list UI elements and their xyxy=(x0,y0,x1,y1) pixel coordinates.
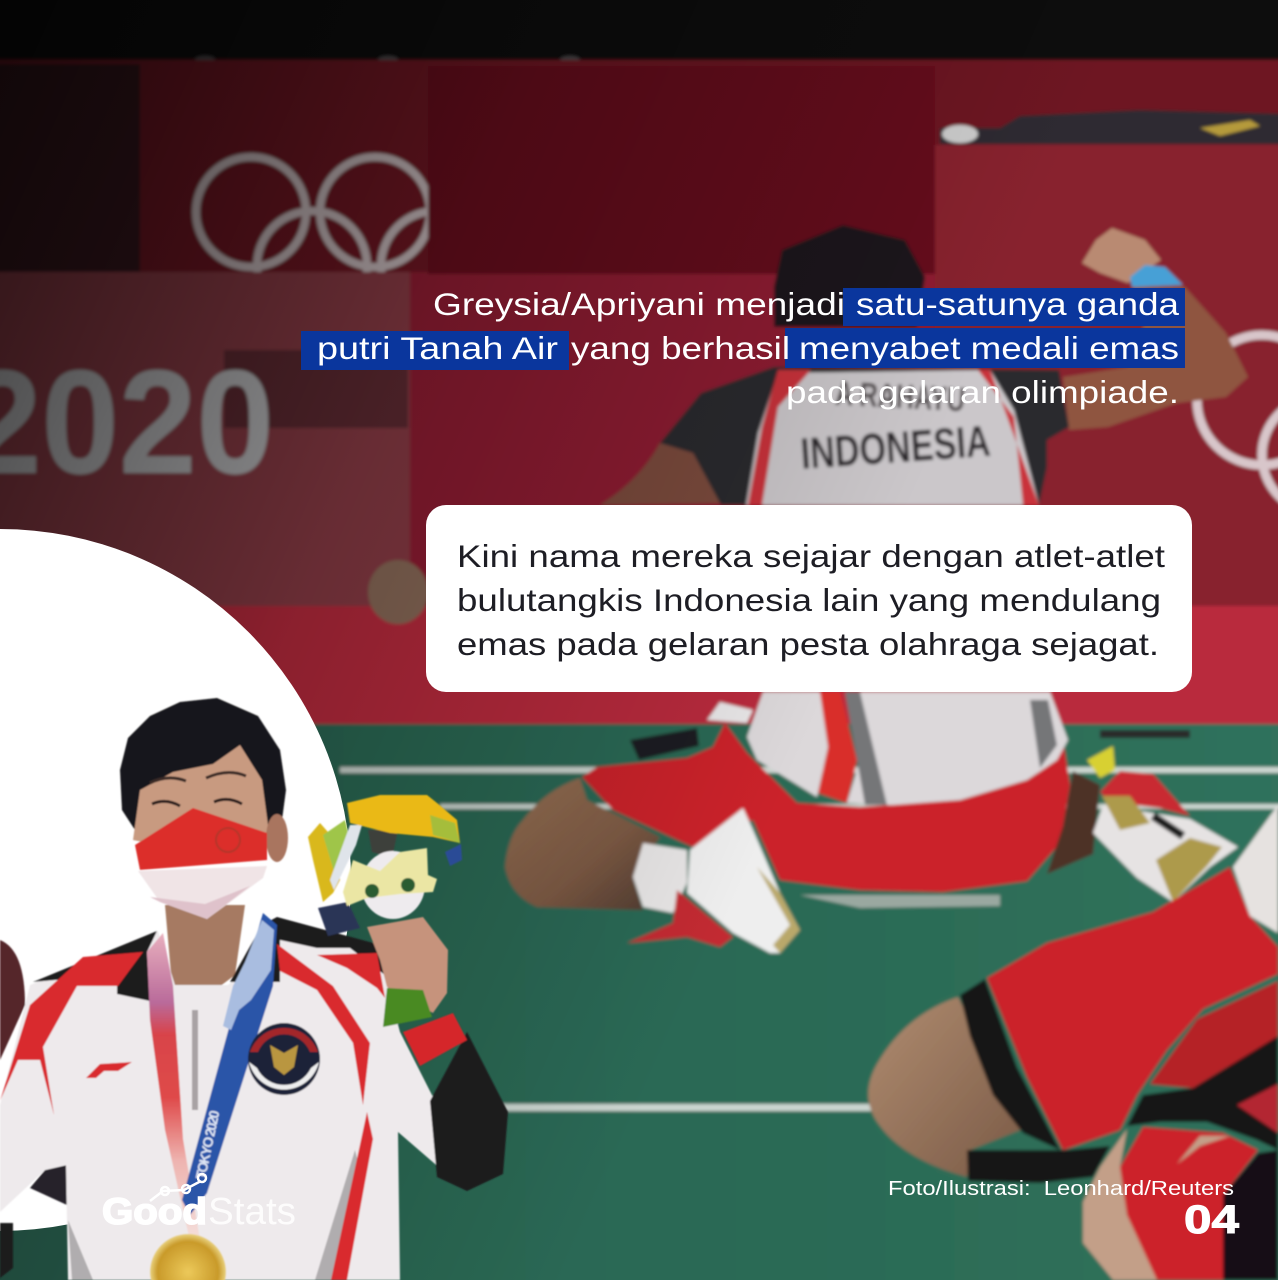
green court floor xyxy=(0,724,1278,1280)
page number: 04 xyxy=(1184,1198,1240,1242)
mask red xyxy=(135,808,267,870)
racket and bottle on top of board xyxy=(940,110,1278,144)
head xyxy=(774,225,925,327)
jersey name: INDONESIA xyxy=(799,417,992,479)
eyebrows and eyes xyxy=(150,772,246,783)
neck xyxy=(165,905,245,1005)
pink medal ribbon xyxy=(147,933,200,1250)
photo credit: Foto/Ilustrasi: Leonhard/Reuters xyxy=(888,1178,1234,1200)
highlight bars xyxy=(301,288,1185,370)
callout text: emas pada gelaran pesta olahraga sejagat. xyxy=(457,626,1159,662)
white circle behind athlete xyxy=(0,529,351,1231)
GoodStats logo xyxy=(102,1174,296,1233)
bouquet leaves xyxy=(383,988,432,1027)
Indonesian emblem xyxy=(248,1023,320,1095)
red skirting band xyxy=(0,606,1278,724)
neighbouring athlete arm xyxy=(0,940,25,1060)
court lines xyxy=(340,767,1278,1111)
jersey xyxy=(746,370,1039,505)
floor shadow xyxy=(800,895,1000,908)
left arm and fist xyxy=(600,443,721,505)
right red board xyxy=(935,145,1278,625)
mask white xyxy=(138,866,267,919)
seated player centre xyxy=(368,225,1248,953)
top caption text: pada gelaran olimpiade. xyxy=(786,374,1179,410)
callout text: bulutangkis Indonesia lain yang mendulang xyxy=(457,582,1161,618)
Olympic rings left xyxy=(196,157,491,321)
dark arena ceiling band xyxy=(0,0,1278,60)
far left dark wall xyxy=(0,64,140,274)
centre upper panel xyxy=(428,66,935,274)
raised arm xyxy=(1063,287,1248,430)
waist jersey xyxy=(707,702,753,723)
ceiling lights xyxy=(195,56,580,64)
lower red wall xyxy=(410,272,1278,622)
top caption text: menyabet medali emas xyxy=(799,330,1179,366)
sleeve and cuff xyxy=(430,1032,508,1191)
top caption text xyxy=(317,286,1180,410)
right leg behind xyxy=(1047,771,1100,874)
GoodStats logo: Good xyxy=(102,1191,207,1232)
black shoulders and collar xyxy=(33,931,157,1001)
front player bottom right xyxy=(868,805,1278,1280)
top caption text: yang berhasil xyxy=(571,330,790,366)
thigh xyxy=(505,778,660,910)
red stripes left xyxy=(0,952,143,1115)
right shoe xyxy=(1093,805,1238,902)
Olympic rings right xyxy=(1197,335,1278,513)
hand xyxy=(367,917,448,1013)
top caption text: putri Tanah Air xyxy=(317,330,558,366)
white callout card xyxy=(426,505,1192,692)
left advertising board xyxy=(0,272,410,610)
upper red wall xyxy=(0,60,1278,300)
shorts xyxy=(582,723,1070,892)
mascot xyxy=(343,848,437,919)
zipper xyxy=(192,1010,198,1110)
jacket body xyxy=(0,931,442,1280)
sock and shoe xyxy=(633,843,687,913)
gap behind left arm xyxy=(30,1165,67,1205)
logo trend icon xyxy=(150,1174,206,1201)
seated player centre: A RAHAYU xyxy=(834,375,966,419)
ear xyxy=(266,814,288,862)
dark sleeves xyxy=(660,367,1069,505)
gold medal xyxy=(150,1234,226,1280)
sunflower bouquet xyxy=(308,795,462,902)
blue medal ribbon xyxy=(182,913,277,1215)
checker pattern on ribbon xyxy=(223,920,274,1030)
red stripes right xyxy=(277,944,370,1105)
body shadow panels xyxy=(68,1150,360,1280)
top caption text: satu-satunya ganda xyxy=(856,286,1180,322)
GoodStats logo: Stats xyxy=(208,1191,296,1233)
Li-Ning logo xyxy=(86,1062,132,1078)
athlete portrait with medal and bouquet xyxy=(0,698,508,1280)
callout text: Kini nama mereka sejajar dengan atlet-atlet xyxy=(457,538,1165,574)
hair xyxy=(120,698,286,835)
top caption text: Greysia/Apriyani menjadi xyxy=(433,286,845,322)
face xyxy=(133,745,270,855)
text on ribbon: TOKYO 2020 xyxy=(192,1109,223,1181)
callout text xyxy=(457,538,1165,662)
